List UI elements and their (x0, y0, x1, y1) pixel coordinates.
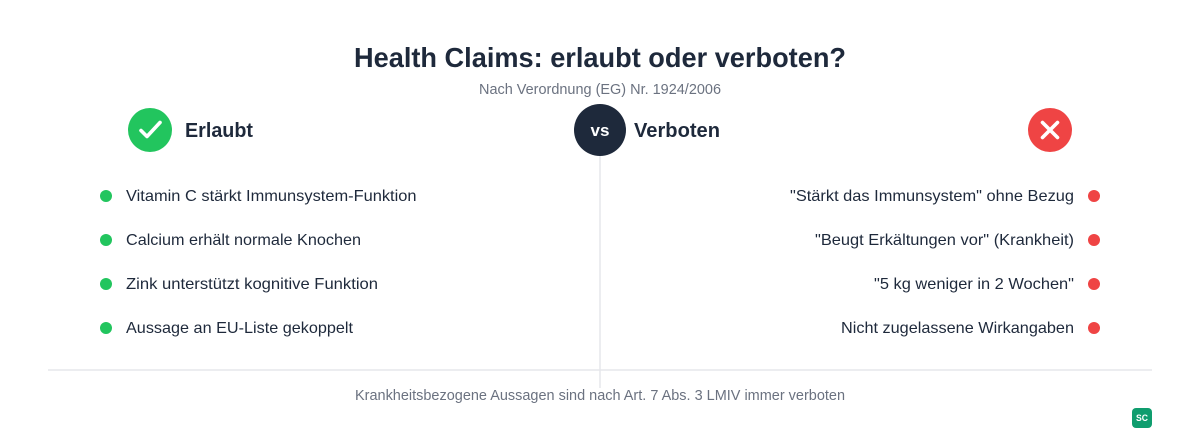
allowed item 2: Calcium erhält normale Knochen (126, 232, 361, 249)
icon: green check (128, 108, 172, 152)
allowed item 4: Aussage an EU-Liste gekoppelt (126, 320, 354, 337)
subtitle: Nach Verordnung (EG) Nr. 1924/2006 (479, 82, 721, 98)
icon: red cross (1028, 108, 1072, 152)
heading: verboten: Verboten (634, 119, 720, 142)
forbidden item 2: "Beugt Erkältungen vor" (Krankheit) (815, 232, 1074, 249)
logo badge: SC (1136, 413, 1148, 423)
forbidden item 3: "5 kg weniger in 2 Wochen" (874, 276, 1074, 293)
vs badge: vs (590, 121, 610, 140)
title: Health Claims: erlaubt oder verboten? (354, 42, 846, 73)
allowed item 3: Zink unterstützt kognitive Funktion (126, 276, 378, 293)
forbidden item 1: "Stärkt das Immunsystem" ohne Bezug (790, 188, 1074, 205)
vs badge (574, 104, 626, 156)
forbidden item 4: Nicht zugelassene Wirkangaben (841, 320, 1074, 337)
panel: verboten (634, 108, 1100, 337)
logo badge (1132, 408, 1152, 428)
heading: erlaubt: Erlaubt (185, 119, 253, 142)
footer note: Krankheitsbezogene Aussagen sind nach Art. 7 Abs. 3 LMIV immer verboten (355, 388, 845, 404)
allowed item 1: Vitamin C stärkt Immunsystem-Funktion (126, 188, 416, 205)
panel: erlaubt (100, 108, 416, 337)
